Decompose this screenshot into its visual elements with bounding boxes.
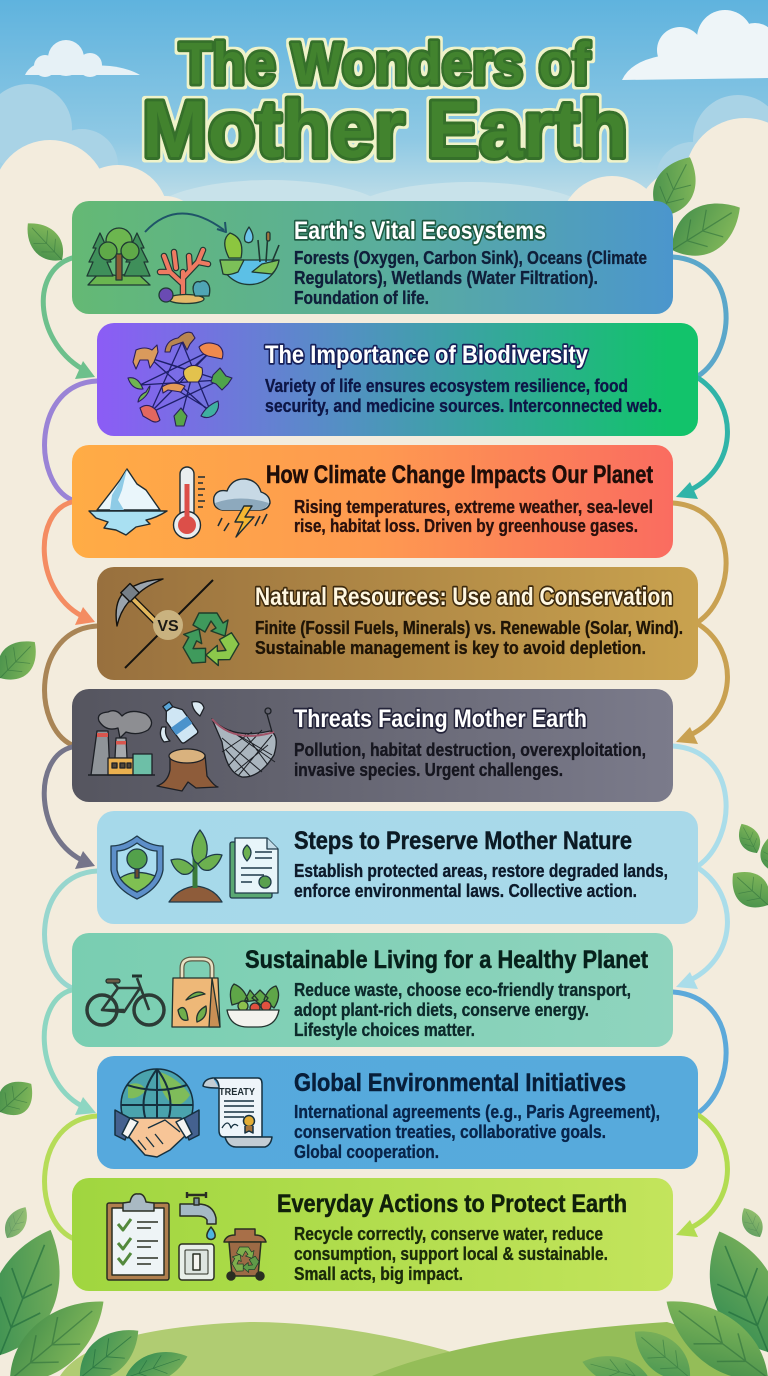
icon: globe, handshake, treaty: [115, 1069, 272, 1157]
body text: Global cooperation.: [294, 1141, 439, 1162]
body text: Pollution, habitat destruction, overexploitation,: [294, 739, 646, 760]
arrow: card 7 to card 8: [44, 990, 96, 1115]
hill: right: [372, 1322, 768, 1376]
arrow: card 5 to card 6: [44, 747, 95, 869]
connector arrows: right side: [673, 257, 727, 1237]
heading: Steps to Preserve Mother Nature: [294, 827, 632, 855]
body text: Forests (Oxygen, Carbon Sink), Oceans (Climate: [294, 247, 647, 268]
body text: Lifestyle choices matter.: [294, 1019, 475, 1040]
leaf: bottom right 2: [651, 1281, 768, 1376]
body text: invasive species. Urgent challenges.: [294, 759, 563, 780]
arrow: right arc 3: [673, 503, 726, 622]
cloud: top left: [25, 40, 140, 77]
body text: Variety of life ensures ecosystem resilience, food: [265, 375, 628, 396]
arrow: right arc 2: [676, 378, 727, 499]
panel: Natural Resources: Use and Conservation: [97, 567, 698, 680]
body text: [265, 375, 662, 416]
arrow: card 8 to card 9 left arc: [45, 1116, 97, 1238]
leaf: bottom right 3: [624, 1318, 701, 1376]
leaf: left edge low: [0, 1072, 42, 1124]
body text: [294, 739, 646, 780]
leaf: bottom left 2: [0, 1282, 120, 1376]
arrow: right arc 5: [673, 746, 726, 866]
panel: Steps to Preserve Mother Nature: [97, 811, 698, 924]
heading: Threats Facing Mother Earth: [294, 705, 587, 733]
icon: bicycle, bag, salad: [87, 959, 279, 1027]
leaf: bottom left 4: [120, 1343, 192, 1376]
heading: How Climate Change Impacts Our Planet: [266, 461, 654, 489]
body text: [294, 1223, 608, 1284]
arrow: card 2 to card 3 left arc: [45, 381, 97, 500]
leaf: right small top: [733, 819, 766, 858]
arrow: right arc 6: [676, 868, 727, 989]
icon: pickaxe vs recycle: [116, 579, 242, 669]
pale centre haze: [150, 180, 595, 254]
body text: Sustainable management is key to avoid depletion.: [255, 637, 646, 658]
body text: Establish protected areas, restore degraded lands,: [294, 860, 668, 881]
leaf: right small low: [736, 1204, 768, 1242]
cream clouds: [0, 118, 768, 280]
leaf: right edge mid: [722, 861, 768, 917]
leaf: small left: [0, 1202, 34, 1243]
icon: checklist, tap, switch, bin: [107, 1192, 266, 1280]
body text: Foundation of life.: [294, 287, 429, 308]
arrow: card 6 to card 7 left arc: [45, 871, 97, 988]
panel: Threats Facing Mother Earth: [72, 689, 673, 802]
body text: security, and medicine sources. Interconnected web.: [265, 395, 662, 416]
icon: iceberg, thermometer, storm cloud: [89, 467, 270, 538]
heading: Earth's Vital Ecosystems: [294, 217, 546, 245]
hill: left: [60, 1322, 520, 1376]
arrow: card 4 to card 5 left arc: [45, 626, 97, 745]
body text: Recycle correctly, conserve water, reduce: [294, 1223, 603, 1244]
icon: web of life: [128, 332, 232, 426]
leaf: bottom right 4: [579, 1348, 654, 1376]
pale mid clouds: [0, 84, 768, 214]
body text: rise, habitat loss. Driven by greenhouse gases.: [294, 515, 638, 536]
body text: [255, 617, 683, 658]
leaf: right of card 1: [660, 188, 752, 270]
leaf: right edge sliver: [757, 836, 768, 874]
panel: The Importance of Biodiversity: [97, 323, 698, 436]
body text: Small acts, big impact.: [294, 1263, 463, 1284]
connector arrows: left side: [43, 258, 97, 1238]
background: sky: [0, 0, 768, 215]
title: The Wonders of: [179, 31, 590, 97]
heading: Natural Resources: Use and Conservation: [255, 583, 673, 611]
panel: Everyday Actions to Protect Earth: [72, 1178, 673, 1291]
body text: Rising temperatures, extreme weather, sea-level: [294, 496, 653, 517]
body text: consumption, support local & sustainable.: [294, 1243, 608, 1264]
leaf: bottom left 3: [68, 1316, 150, 1376]
arrow: card 3 to card 4: [44, 502, 95, 625]
leaf: left of card 1: [18, 214, 72, 270]
body text: [294, 1101, 660, 1162]
body text: [294, 860, 668, 901]
leaf: big bottom left: [0, 1218, 80, 1367]
body text: enforce environmental laws. Collective action.: [294, 880, 637, 901]
leaf: upper right: [642, 148, 708, 225]
heading: Sustainable Living for a Healthy Planet: [245, 946, 649, 974]
leaf: left edge mid: [0, 630, 47, 690]
arrow: right arc 1: [673, 257, 726, 376]
panel: Global Environmental Initiatives: [97, 1056, 698, 1169]
panel: Earth's Vital Ecosystems: [72, 201, 673, 314]
arrow: card 1 to card 2: [43, 258, 95, 379]
leaf: big bottom right: [690, 1220, 768, 1364]
body text: Reduce waste, choose eco-friendly transport,: [294, 979, 631, 1000]
panel: Sustainable Living for a Healthy Planet: [72, 933, 673, 1047]
heading: Global Environmental Initiatives: [294, 1069, 626, 1097]
body text: adopt plant-rich diets, conserve energy.: [294, 999, 589, 1020]
body text: International agreements (e.g., Paris Agreement),: [294, 1101, 660, 1122]
title: [142, 31, 628, 175]
icon: factory, bottle, stump, net: [88, 698, 276, 791]
title: Mother Earth: [142, 85, 628, 175]
cloud: top right: [622, 10, 768, 80]
body text: [294, 247, 647, 308]
icon: shield, sprout, document: [111, 830, 278, 902]
body text: Regulators), Wetlands (Water Filtration).: [294, 267, 598, 288]
vs label: VS: [157, 618, 179, 635]
panel: How Climate Change Impacts Our Planet: [72, 445, 673, 558]
icon: forest, coral, wetland: [87, 213, 279, 304]
body text: [294, 979, 631, 1040]
body text: [294, 496, 653, 536]
heading: The Importance of Biodiversity: [265, 341, 588, 369]
arrow: right arc 8: [676, 1115, 727, 1237]
treaty label: TREATY: [219, 1086, 255, 1098]
arrow: right arc 7: [673, 992, 726, 1113]
heading: Everyday Actions to Protect Earth: [277, 1190, 627, 1218]
body text: Finite (Fossil Fuels, Minerals) vs. Renewable (Solar, Wind).: [255, 617, 683, 638]
body text: conservation treaties, collaborative goals.: [294, 1121, 606, 1142]
arrow: right arc 4: [676, 624, 727, 744]
